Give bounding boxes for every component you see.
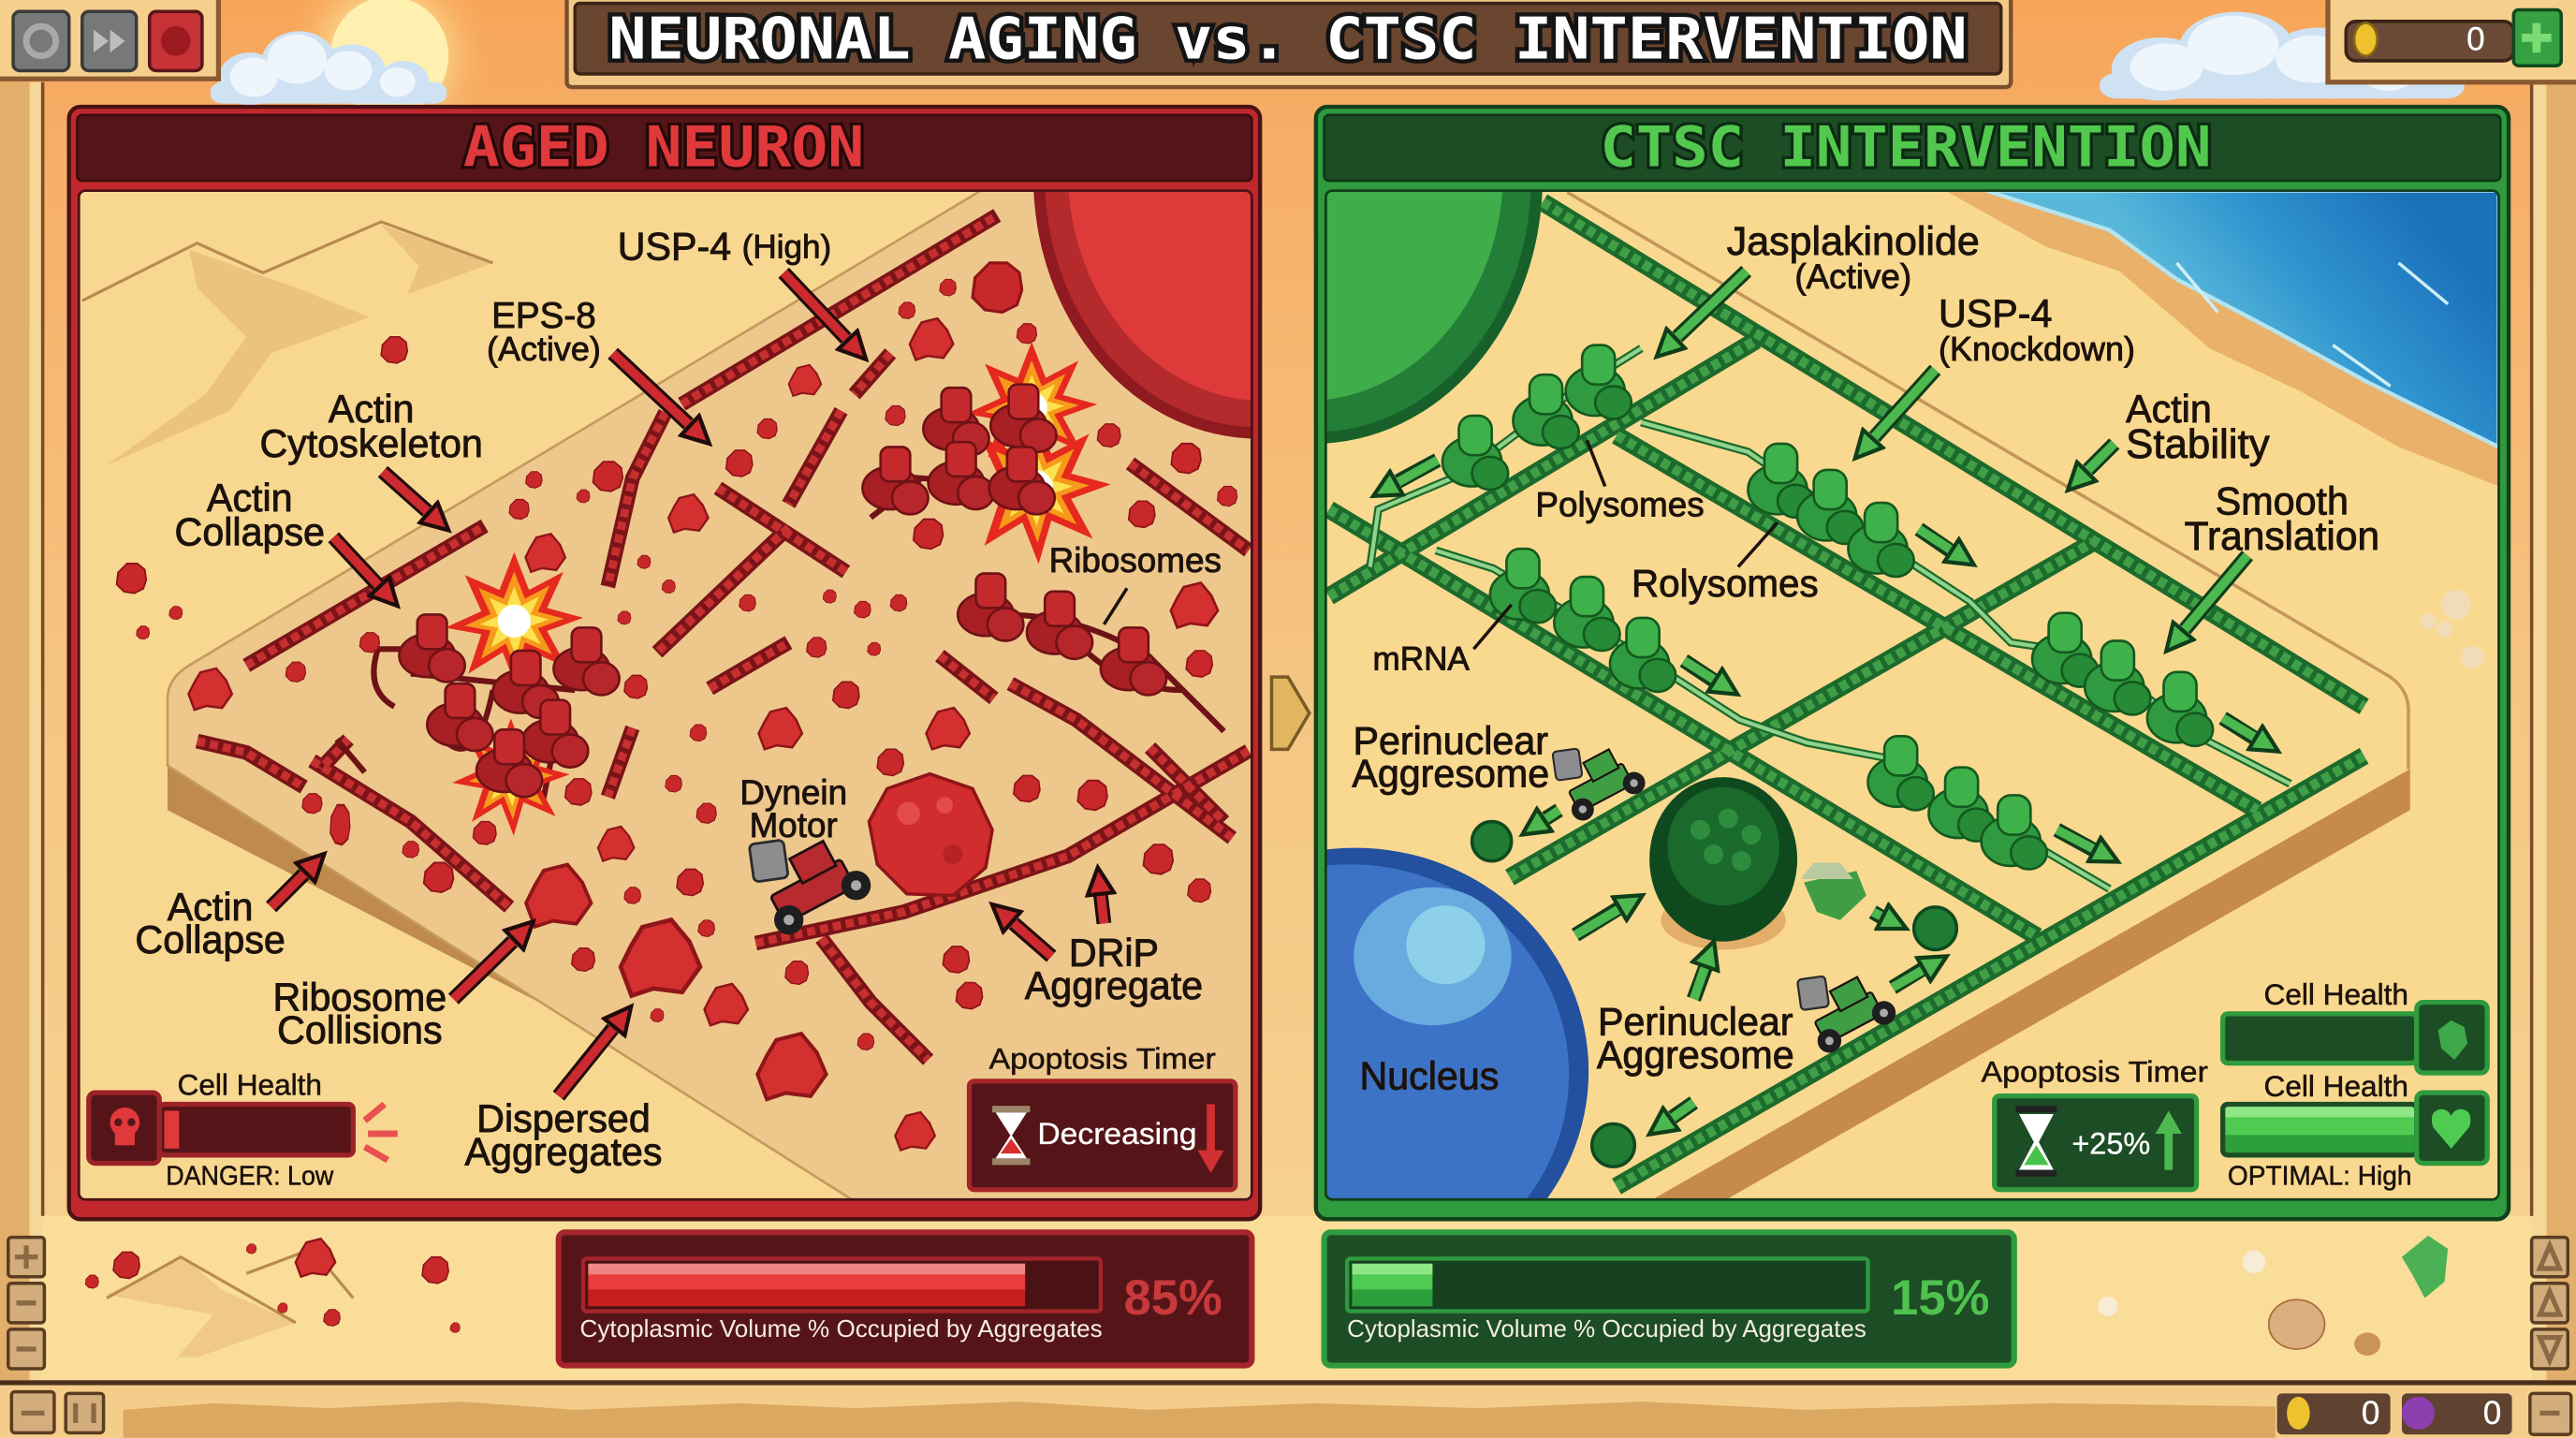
label: actin collapse bottom: Collapse	[135, 918, 285, 961]
label: dispersed aggregates: Dispersed	[476, 1097, 651, 1140]
label: ribosomes: Ribosomes	[1049, 541, 1222, 580]
header: aged neuron	[77, 115, 1251, 181]
platform side wall	[1649, 769, 2410, 1201]
platform side wall	[168, 768, 537, 1002]
bottom-right beach decoration	[2098, 1236, 2448, 1356]
coin counter: 0	[2466, 22, 2485, 58]
bottom strip	[0, 1380, 2576, 1438]
label: actin collapse bottom: Actin	[168, 886, 253, 929]
label: dynein motor: Dynein	[739, 772, 847, 811]
stat bar: aged 85%: Cytoplasmic Volume % Occupied by Aggregates	[580, 1316, 1103, 1343]
bottom-left desert decoration	[85, 1239, 460, 1357]
arrow: ribosome collisions	[453, 940, 514, 999]
arrow: flow left	[1397, 460, 1438, 483]
body inner outline	[79, 191, 1251, 1199]
widget: apoptosis timer increased: Apoptosis Timer	[1982, 1054, 2208, 1088]
label: dispersed aggregates: Aggregates	[465, 1130, 662, 1173]
stat bar: CTSC 15%: 15%	[1891, 1270, 1989, 1326]
arrow: EPS-8	[613, 353, 690, 426]
widget: cell health optimal: Cell Health	[2264, 1069, 2408, 1103]
label: actin stability: Actin	[2126, 388, 2212, 431]
arrow: timer up	[2156, 1110, 2182, 1170]
clouds left	[211, 31, 446, 105]
red cell membrane lobe	[1033, 192, 1251, 438]
arrow: to cargo bottom	[1671, 1103, 1694, 1119]
panel: CTSC intervention	[1086, 0, 2509, 1295]
DRiP aggregate boulder	[869, 774, 992, 896]
leader: ribosomes	[1104, 588, 1127, 624]
arrow: DRiP to truck	[1012, 922, 1051, 956]
icon: skull	[110, 1108, 139, 1145]
widget: cell health danger	[89, 1067, 398, 1192]
title banner: NEURONAL AGING vs. CTSC INTERVENTION	[608, 7, 1968, 73]
smooth polysomes	[1442, 345, 2213, 869]
label: perinuclear aggresome bottom: Perinuclear	[1598, 1001, 1793, 1044]
arrow: USP-4 knockdown	[1873, 370, 1936, 439]
label: perinuclear aggresome top: Aggresome	[1352, 753, 1549, 796]
leader: polysomes	[1587, 440, 1605, 487]
bottom gem counter	[2402, 1393, 2512, 1434]
center transition arrow	[1271, 677, 1310, 749]
header: aged neuron: AGED NEURON	[463, 115, 864, 180]
clouds right	[2100, 12, 2465, 100]
arrow: flow 3	[2223, 718, 2256, 738]
fast-forward button	[82, 11, 137, 70]
icon: hourglass green	[2016, 1106, 2056, 1177]
label: DRiP aggregate: Aggregate	[1025, 964, 1203, 1007]
arrow: DRiP up	[1101, 894, 1104, 923]
label: ribosome collisions: Ribosome	[273, 976, 446, 1019]
scene: aged neuron cell body	[80, 192, 1251, 1198]
top-right coin panel	[2328, 0, 2576, 82]
widget: cell health empty	[2223, 977, 2487, 1073]
label: polysomes: Polysomes	[1535, 485, 1705, 523]
dynein motor truck	[749, 840, 871, 934]
right frame column	[2530, 82, 2576, 1380]
arrow: jasplakinolide	[1676, 271, 1747, 339]
label: jasplakinolide active: Jasplakinolide	[1727, 219, 1980, 264]
label: mRNA: mRNA	[1372, 640, 1470, 677]
ribosome collision tangles	[337, 477, 1224, 805]
widget: cell health danger: Cell Health	[178, 1067, 322, 1101]
label: actin collapse top: Actin	[207, 477, 293, 520]
label: USP-4 high: USP-4 (High)	[618, 225, 831, 268]
arrow: truck to cargo	[1893, 970, 1924, 988]
label: USP-4 knockdown: USP-4	[1939, 292, 2052, 335]
label: actin cytoskeleton: Cytoskeleton	[259, 422, 483, 465]
label: EPS-8 active: (Active)	[487, 330, 601, 368]
leader: mRNA	[1473, 605, 1512, 649]
right side buttons	[2530, 1238, 2571, 1434]
label: perinuclear aggresome top: Perinuclear	[1353, 720, 1548, 763]
arrow: flow 4	[2056, 829, 2095, 849]
arrow: into aggresome bottom	[1694, 966, 1705, 999]
widget: apoptosis timer decreasing: Apoptosis Timer	[989, 1041, 1216, 1075]
header: CTSC intervention	[1325, 115, 2500, 181]
beach and ocean	[1945, 191, 2499, 487]
plus button	[2513, 10, 2561, 66]
top-left button panel	[0, 0, 218, 79]
bottom gold counter: 0	[2362, 1395, 2379, 1431]
collapsed actin filaments	[198, 215, 1249, 1060]
arrow: dispersed aggregates	[559, 1027, 614, 1096]
stable actin filament lattice	[1329, 202, 2364, 1186]
beach pebbles	[2420, 590, 2484, 668]
label: DRiP aggregate: DRiP	[1069, 932, 1159, 975]
panel: aged neuron	[67, 105, 1262, 1221]
platform top	[168, 191, 1251, 1201]
dynein truck bottom	[1797, 976, 1895, 1052]
arrow: actin cytoskeleton	[383, 472, 429, 513]
label: smooth translation: Translation	[2185, 514, 2379, 558]
leader: rolysomes	[1738, 522, 1778, 567]
blue nucleus	[1122, 848, 1588, 1295]
left frame column	[0, 82, 44, 1380]
arrow: flow 2	[1684, 661, 1715, 681]
label: rolysomes: Rolysomes	[1632, 562, 1819, 605]
arrow: actin collapse bottom	[271, 873, 305, 907]
widget: apoptosis timer increased: +25%	[2071, 1127, 2150, 1161]
label: USP-4 knockdown: (Knockdown)	[1939, 330, 2135, 368]
left side buttons	[8, 1238, 104, 1432]
arrow: smooth translation	[2184, 555, 2247, 631]
icon: heart	[2432, 1109, 2470, 1149]
panel frame	[1316, 107, 2509, 1219]
arrow: timer down	[1197, 1104, 1224, 1173]
red button	[150, 11, 202, 70]
bottom gold counter	[2277, 1393, 2391, 1434]
arrow: into aggresome left	[1575, 909, 1620, 935]
scene: CTSC treated cell body	[1086, 0, 2499, 1295]
icon: damaged heart	[2438, 1020, 2467, 1060]
label: actin cytoskeleton: Actin	[329, 388, 414, 431]
label: perinuclear aggresome bottom: Aggresome	[1597, 1034, 1794, 1077]
stat bar: aged 85%: 85%	[1123, 1270, 1222, 1326]
mRNA strands	[1370, 348, 2291, 889]
arrow: flow 1	[1919, 529, 1952, 550]
widget: cell health optimal: OPTIMAL: High	[2228, 1162, 2411, 1192]
body inner outline	[1325, 191, 2499, 1199]
widget: cell health danger: DANGER: Low	[166, 1162, 333, 1192]
label: EPS-8 active: EPS-8	[491, 295, 596, 335]
green cell membrane lobe	[1086, 0, 1543, 444]
icon: hourglass	[992, 1106, 1030, 1165]
collided ribosome clusters	[399, 385, 1166, 797]
widget: apoptosis timer decreasing: Decreasing	[1037, 1117, 1197, 1151]
label: actin collapse top: Collapse	[175, 511, 325, 554]
platform edge line	[1567, 192, 2408, 769]
arrow: USP-4	[783, 272, 848, 340]
label: ribosome collisions: Collisions	[277, 1008, 443, 1051]
widget: cell health optimal	[2223, 1069, 2487, 1192]
widget: cell health empty: Cell Health	[2264, 977, 2408, 1011]
perinuclear aggresome ball	[1649, 777, 1797, 949]
settings button	[13, 11, 69, 70]
small aggresome cargo balls	[1472, 822, 1956, 1167]
scattered red aggregates	[117, 263, 1237, 1151]
arrow: to cargo mid	[1873, 912, 1882, 917]
stat bar: CTSC 15%	[1325, 1232, 2014, 1366]
label: jasplakinolide active: (Active)	[1794, 257, 1911, 295]
arrow: to cargo top	[1544, 810, 1559, 820]
panel frame	[69, 107, 1260, 1219]
widget: apoptosis timer decreasing	[970, 1041, 1236, 1190]
explosions	[446, 342, 1111, 836]
arrow: actin stability	[2086, 444, 2115, 472]
widget: apoptosis timer increased	[1982, 1054, 2208, 1190]
stat bar: CTSC 15%: Cytoplasmic Volume % Occupied by Aggregates	[1347, 1316, 1866, 1343]
title banner	[567, 0, 2011, 87]
dynein truck top	[1552, 748, 1646, 821]
label: dynein motor: Motor	[750, 806, 838, 844]
coin counter	[2346, 22, 2513, 61]
stat bar: aged 85%	[559, 1232, 1251, 1366]
sun	[279, 0, 496, 165]
bottom gem counter: 0	[2483, 1395, 2501, 1431]
header: CTSC intervention: CTSC INTERVENTION	[1600, 115, 2211, 180]
faded truck	[1801, 862, 1866, 920]
label: smooth translation: Smooth	[2216, 479, 2349, 522]
arrow: actin collapse top	[333, 537, 379, 587]
label: nucleus: Nucleus	[1359, 1055, 1499, 1098]
desert dunes	[82, 222, 493, 465]
label: actin stability: Stability	[2126, 420, 2270, 466]
